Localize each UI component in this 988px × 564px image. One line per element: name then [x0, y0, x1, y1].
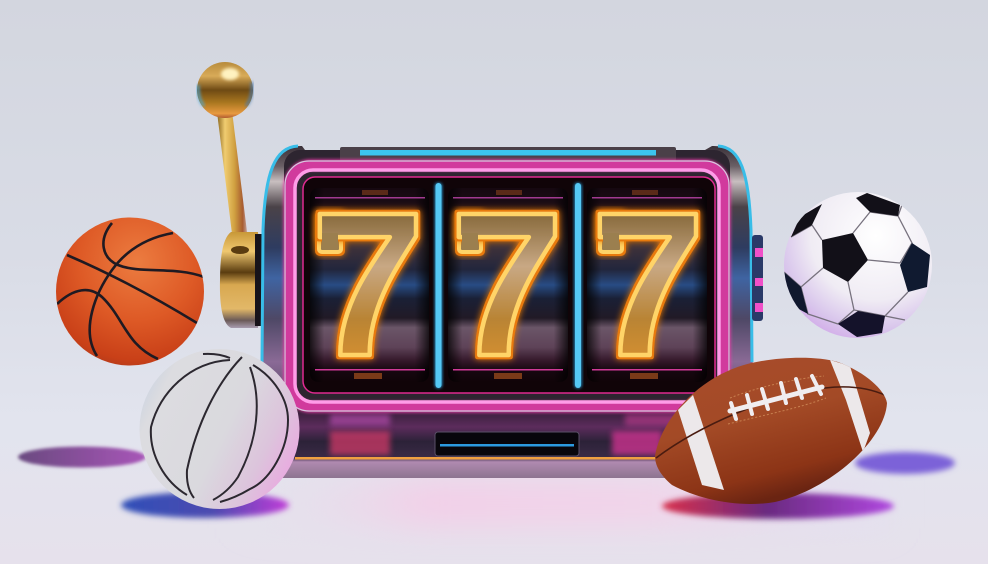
lever ball [197, 62, 253, 118]
machine lower panel [280, 405, 732, 478]
top cyan bar [340, 147, 676, 161]
right side buttons [752, 235, 763, 321]
american football [655, 358, 887, 504]
jackpot sevens: 7 [591, 170, 705, 399]
seam [656, 387, 887, 458]
seven flag accents [319, 214, 622, 252]
reel 3 [587, 188, 707, 382]
slot machine [261, 146, 763, 478]
stitched panel outline [728, 376, 826, 424]
reel dividers [435, 183, 582, 388]
orange basketball [56, 218, 204, 366]
seven flag joins [322, 233, 619, 249]
reel 1 [310, 188, 429, 382]
left drum cap [261, 146, 305, 400]
jackpot sevens [311, 170, 705, 399]
panel seams [784, 205, 912, 324]
jackpot sevens: 7 [311, 170, 425, 399]
floor shadows [18, 446, 955, 519]
black panels [784, 193, 930, 337]
right drum cap [705, 146, 753, 400]
reel 2 [448, 188, 568, 382]
lever hub [220, 232, 264, 328]
lever arm [217, 111, 249, 250]
reel window [303, 177, 715, 393]
neon pink frame [285, 161, 729, 411]
white stripes [678, 360, 870, 490]
coin slot [435, 432, 579, 456]
white basketball [140, 349, 300, 509]
lever [197, 62, 264, 328]
machine body [284, 150, 730, 412]
jackpot sevens: 7 [450, 170, 564, 399]
laces [730, 376, 822, 419]
soccer ball [784, 192, 932, 338]
